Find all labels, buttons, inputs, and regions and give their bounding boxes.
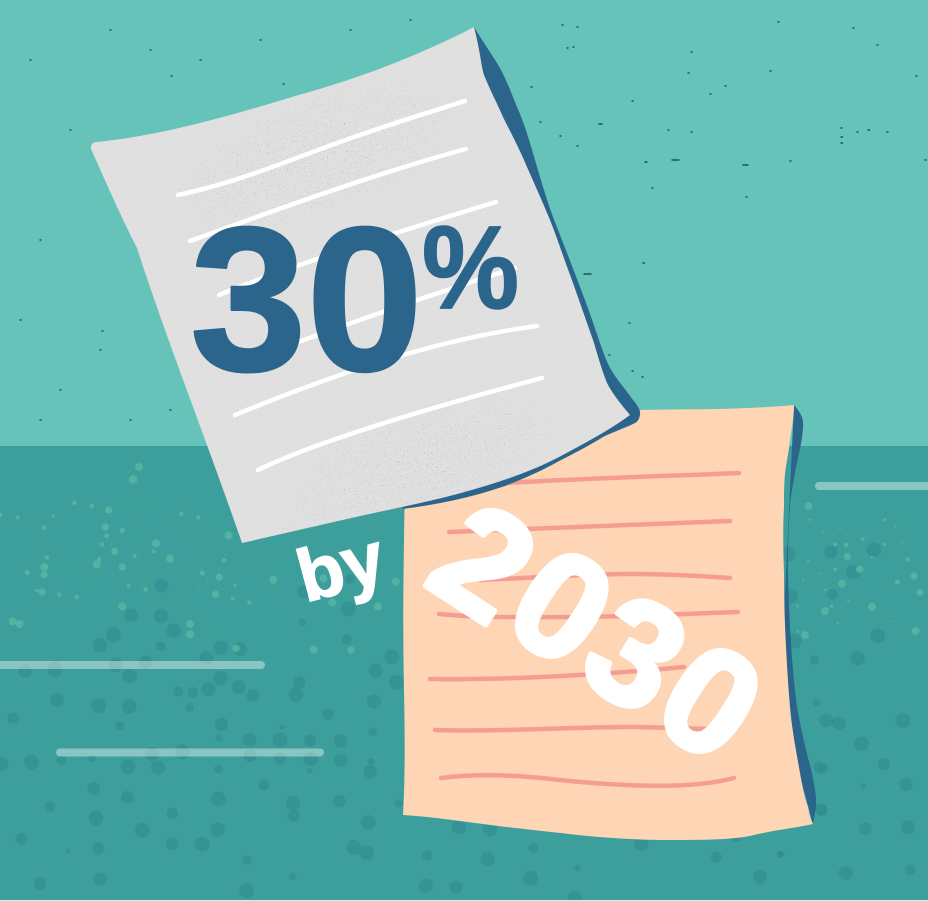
grey note	[80, 20, 650, 550]
peach note: ruled lines	[430, 473, 739, 786]
label: by: by	[288, 515, 393, 618]
grey note: ruled lines	[178, 101, 542, 470]
peach note: 2030 label: 2	[403, 469, 565, 655]
peach note: 2030 label	[403, 469, 792, 794]
peach note: 2030 label: 0	[630, 608, 792, 794]
fine light speckle on floor	[51, 502, 360, 620]
bottom edge line	[0, 900, 928, 901]
motion line: right	[819, 482, 928, 490]
grey note: sheet	[91, 27, 630, 543]
background: lower dark teal floor	[0, 446, 928, 901]
background: upper teal wall	[0, 0, 928, 446]
grey note: blue shadow edge	[402, 27, 640, 509]
background: wall speckle texture	[0, 0, 928, 446]
grey note: 30% label: %	[422, 202, 519, 334]
grey note: 30% label: 30	[190, 185, 423, 414]
peach note: blue shadow edge	[780, 405, 816, 824]
light floor dots, left	[0, 463, 400, 654]
peach note: 2030 label: 3	[557, 560, 715, 746]
dark floor dots, right	[777, 542, 915, 880]
light floor dots, right	[796, 502, 924, 639]
background: wall dark specks	[20, 20, 926, 420]
peach note	[403, 405, 816, 840]
peach note: 2030 label: 0	[481, 513, 643, 699]
grey note: speckle texture	[80, 20, 650, 550]
motion line: upper left	[0, 661, 261, 669]
dark floor dots, bottom	[395, 799, 827, 901]
dark floor dots, left	[0, 574, 404, 898]
peach note: sheet	[403, 405, 813, 840]
motion line: lower left	[60, 748, 320, 756]
grey note: 30% label	[190, 185, 519, 414]
